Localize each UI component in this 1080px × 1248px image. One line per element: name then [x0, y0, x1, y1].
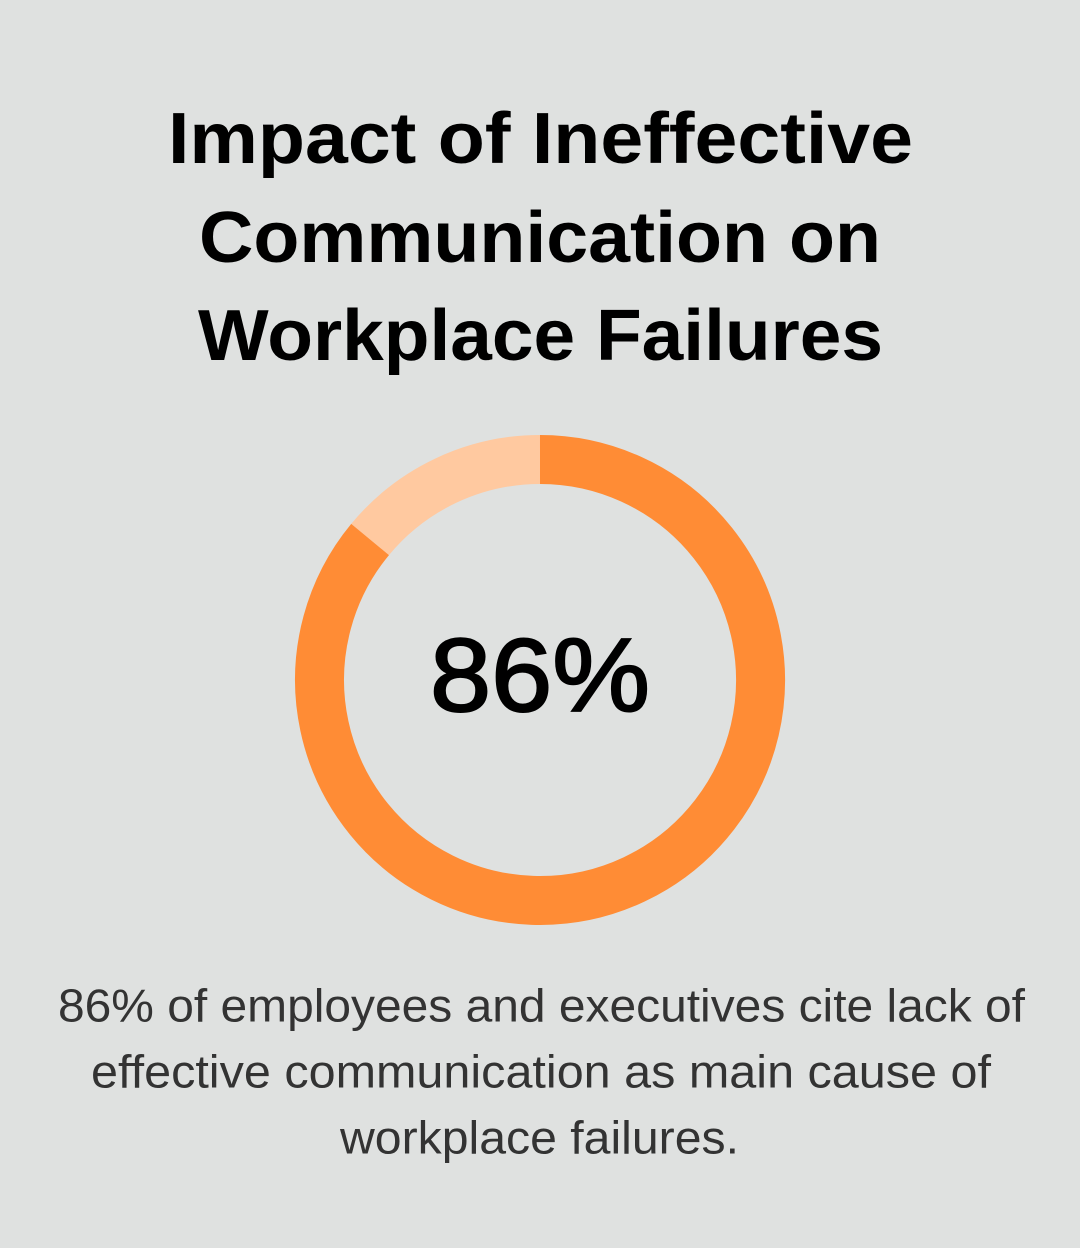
description text: effective communication as main cause of [91, 1046, 991, 1098]
donut chart: 86 percent [320, 460, 761, 900]
center value: 86% [430, 618, 650, 734]
title: Workplace Failures [198, 296, 883, 376]
title [168, 99, 913, 376]
description text [58, 980, 1025, 1164]
remaining 14 percent segment [370, 460, 540, 540]
description text: workplace failures. [339, 1112, 739, 1164]
title: Impact of Ineffective [168, 99, 913, 179]
86 percent segment [320, 460, 761, 900]
title: Communication on [199, 198, 881, 278]
description text: 86% of employees and executives cite lack of [58, 980, 1025, 1032]
